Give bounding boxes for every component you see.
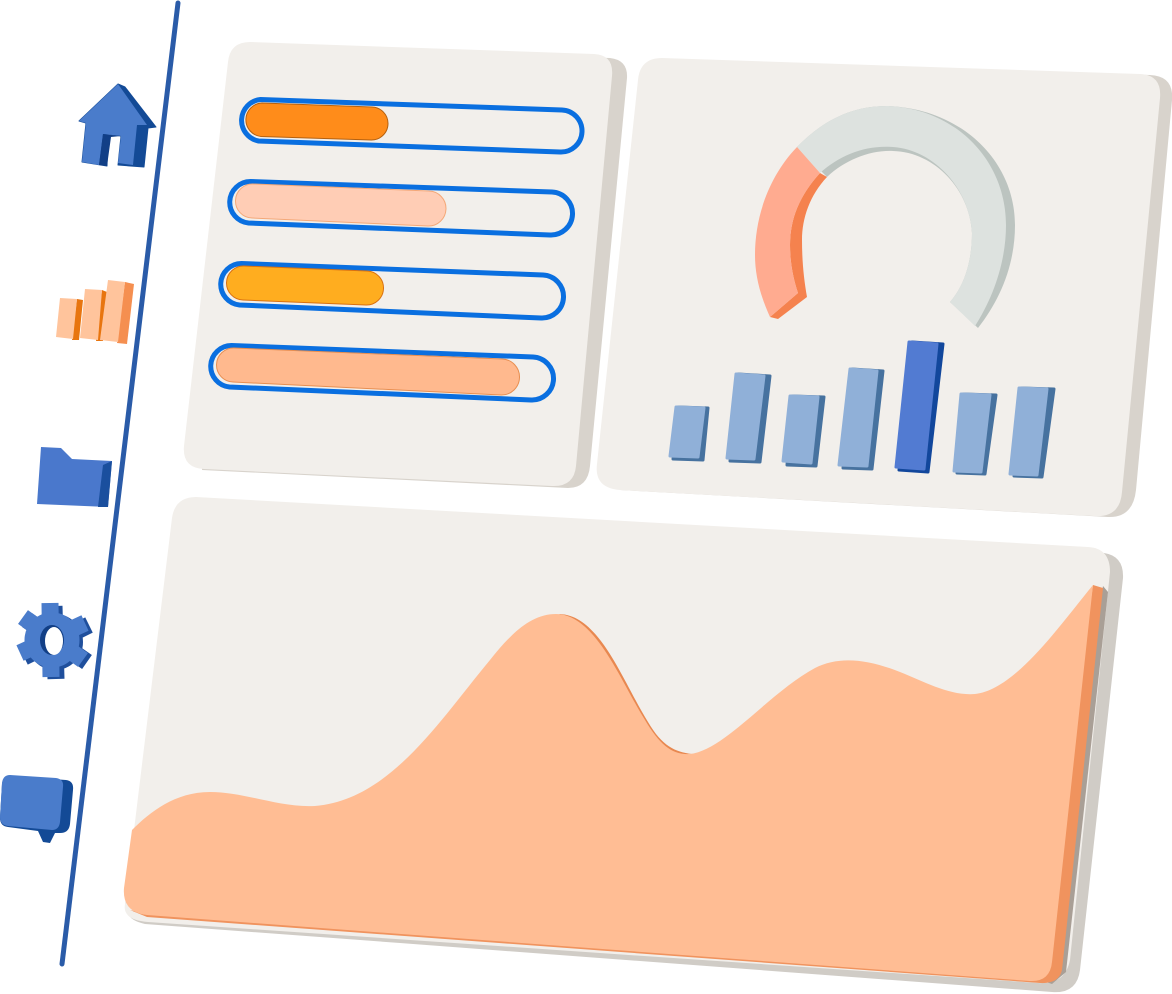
gauge chart xyxy=(755,106,1015,328)
icon: bar chart xyxy=(56,280,134,344)
progress bar 2 xyxy=(230,182,573,235)
panel: progress bars xyxy=(184,42,627,488)
icon: chat bubble xyxy=(0,775,73,843)
area chart xyxy=(124,585,1108,984)
sidebar line xyxy=(62,3,178,964)
icon: home xyxy=(79,84,156,167)
progress bar 3 xyxy=(221,264,564,318)
icon: gear xyxy=(20,603,89,679)
progress bar 1 xyxy=(242,100,582,152)
bar chart xyxy=(670,342,1054,477)
icon: folder xyxy=(37,447,112,507)
panel: gauge and bars xyxy=(597,58,1172,517)
panel: area chart xyxy=(124,497,1123,992)
progress bar 4 xyxy=(211,346,554,400)
